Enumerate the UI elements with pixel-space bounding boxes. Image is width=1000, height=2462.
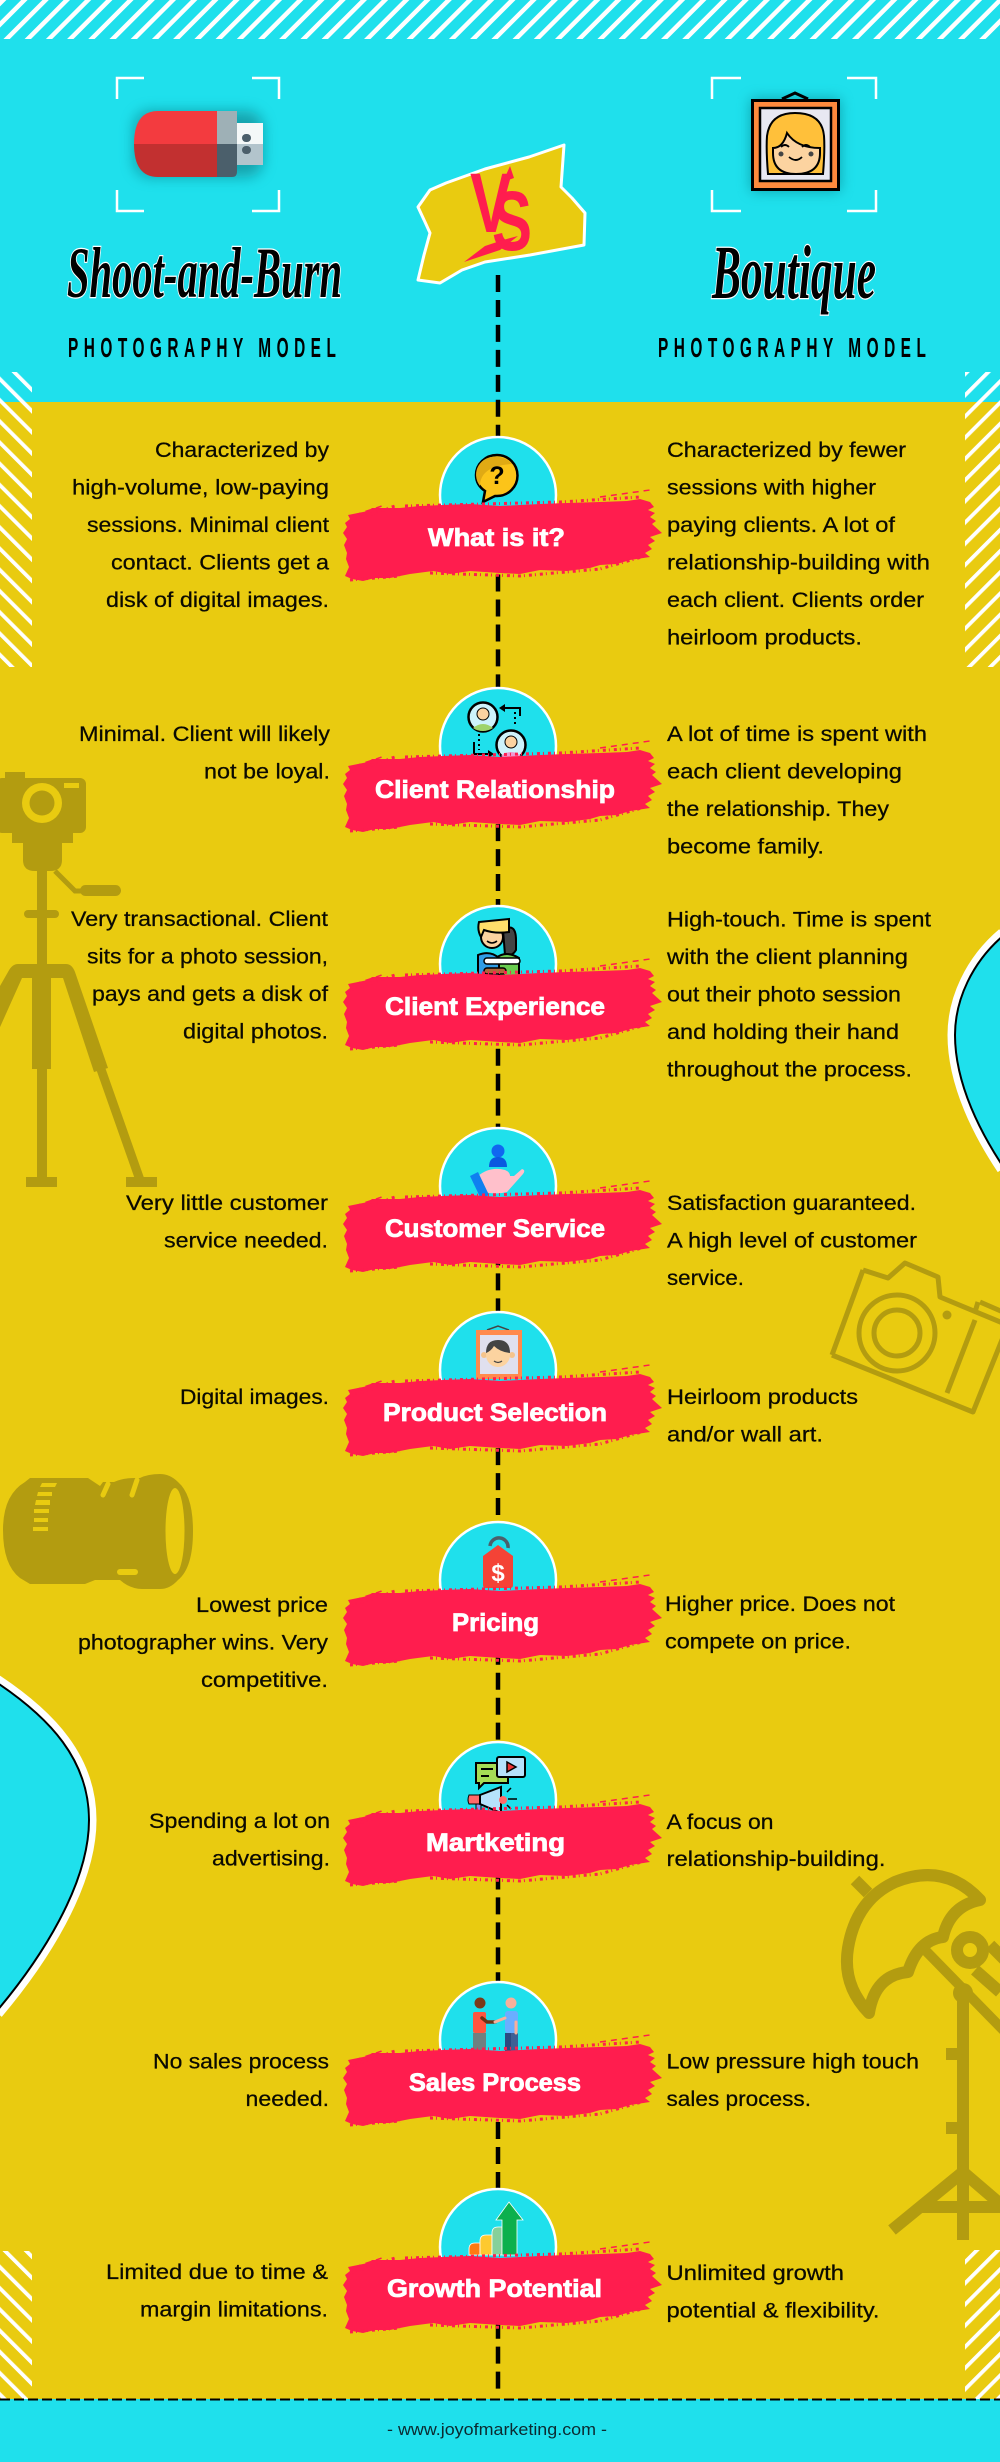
banner: Pricing: Pricing bbox=[452, 1609, 539, 1637]
banner: Growth Potential: Growth Potential bbox=[387, 2275, 602, 2303]
banner: Martketing: Martketing bbox=[426, 1829, 565, 1857]
icon: right viewfinder brackets bbox=[712, 78, 876, 211]
right text: each client developing bbox=[667, 760, 902, 784]
icon badge: growth chart bbox=[440, 2189, 556, 2305]
right text: each client. Clients order bbox=[667, 589, 924, 612]
silhouette: lens bbox=[3, 1474, 193, 1589]
left text: not be loyal. bbox=[204, 760, 330, 784]
right text: A focus on bbox=[666, 1811, 774, 1834]
left text: Limited due to time & bbox=[106, 2261, 328, 2284]
right text: throughout the process. bbox=[667, 1058, 912, 1082]
left text bbox=[72, 439, 330, 612]
left text: contact. Clients get a bbox=[111, 552, 329, 574]
right text: Unlimited growth bbox=[666, 2262, 844, 2285]
right text: A lot of time is spent with bbox=[667, 723, 927, 746]
lower right side stripes bbox=[965, 2250, 1000, 2399]
left text bbox=[78, 1594, 329, 1692]
panel: Client Experience bbox=[71, 906, 931, 1082]
icon badge: price tag bbox=[440, 1522, 556, 1638]
icon badge: question: ? bbox=[489, 462, 505, 490]
left text: Characterized by bbox=[155, 439, 330, 462]
icon badge: handshake bbox=[440, 1982, 556, 2098]
right text: paying clients. A lot of bbox=[667, 514, 895, 537]
left text: sessions. Minimal client bbox=[87, 514, 329, 537]
left text bbox=[106, 2261, 328, 2322]
right text bbox=[667, 1386, 858, 1446]
icon badge: hugging people bbox=[440, 906, 556, 1022]
right text: service. bbox=[667, 1267, 744, 1290]
left text: service needed. bbox=[164, 1230, 328, 1252]
subtitle: left: PHOTOGRAPHY MODEL bbox=[68, 332, 336, 363]
right text bbox=[666, 908, 931, 1082]
right text: relationship-building with bbox=[667, 552, 930, 574]
lower left side stripes bbox=[0, 2251, 32, 2399]
right text: Low pressure high touch bbox=[666, 2050, 919, 2074]
banner: What is it? bbox=[343, 490, 662, 581]
banner: Client Relationship bbox=[343, 741, 662, 832]
right text: with the client planning bbox=[666, 946, 908, 969]
icon badge: question bbox=[440, 437, 556, 553]
banner: Product Selection bbox=[343, 1365, 662, 1456]
icon badge: hand holding person bbox=[440, 1128, 556, 1244]
left text: Minimal. Client will likely bbox=[79, 723, 331, 746]
left text: No sales process bbox=[153, 2050, 329, 2074]
banner: Client Experience: Client Experience bbox=[385, 993, 605, 1021]
right text: become family. bbox=[667, 836, 824, 858]
right text: Satisfaction guaranteed. bbox=[667, 1192, 916, 1215]
right text bbox=[665, 1593, 895, 1654]
icon badge: framed boy portrait bbox=[440, 1312, 556, 1428]
right text: relationship-building. bbox=[666, 1848, 886, 1871]
left text bbox=[149, 1810, 330, 1870]
left text bbox=[79, 723, 331, 784]
panel: Growth Potential bbox=[106, 2189, 880, 2333]
VS badge bbox=[418, 145, 585, 283]
icon: USB drive bbox=[134, 111, 263, 177]
left text bbox=[71, 908, 328, 1044]
banner: What is it?: What is it? bbox=[428, 524, 565, 552]
left text: margin limitations. bbox=[140, 2298, 328, 2322]
right text: Higher price. Does not bbox=[665, 1593, 895, 1616]
left text bbox=[153, 2050, 329, 2111]
top striped band bbox=[0, 0, 1000, 39]
VS lettering: S bbox=[492, 174, 532, 268]
left text bbox=[126, 1192, 328, 1252]
banner: Client Relationship: Client Relationship bbox=[375, 776, 615, 804]
left text: photographer wins. Very bbox=[78, 1632, 329, 1654]
silhouette: umbrella light bbox=[847, 1875, 1000, 2240]
banner: Martketing bbox=[343, 1795, 662, 1886]
left text: advertising. bbox=[212, 1848, 330, 1870]
right text bbox=[667, 1192, 917, 1290]
panel: Sales Process bbox=[153, 1982, 919, 2126]
header background bbox=[0, 0, 1000, 402]
panel: Marketing bbox=[149, 1742, 886, 1886]
icon: portrait frame bbox=[751, 93, 840, 191]
right text bbox=[667, 439, 930, 650]
icon badge: price tag: $ bbox=[491, 1560, 505, 1587]
footer background bbox=[0, 2399, 1000, 2462]
right text: and/or wall art. bbox=[667, 1424, 823, 1446]
left text: Very transactional. Client bbox=[71, 908, 328, 931]
panel: Product Selection bbox=[180, 1312, 858, 1456]
footer website: - www.joyofmarketing.com - bbox=[387, 2420, 607, 2439]
left text: digital photos. bbox=[183, 1020, 328, 1044]
right text: compete on price. bbox=[665, 1630, 851, 1654]
right text: sessions with higher bbox=[667, 476, 876, 500]
silhouette: outline camera bbox=[832, 1263, 1000, 1412]
banner: Customer Service: Customer Service bbox=[385, 1215, 605, 1243]
right text bbox=[666, 2050, 919, 2111]
upper left side stripes bbox=[0, 372, 32, 667]
panel: right model header bbox=[658, 78, 926, 363]
left text: high-volume, low-paying bbox=[72, 476, 329, 500]
right text: Heirloom products bbox=[667, 1386, 858, 1409]
panel: What is it? bbox=[72, 437, 930, 650]
right text: out their photo session bbox=[667, 984, 901, 1006]
right text: and holding their hand bbox=[667, 1021, 899, 1044]
VS lettering bbox=[464, 156, 532, 268]
right text: heirloom products. bbox=[667, 626, 862, 650]
right text bbox=[666, 1811, 886, 1871]
panel: left model header bbox=[67, 78, 342, 363]
banner: Sales Process bbox=[343, 2035, 662, 2126]
left text: disk of digital images. bbox=[106, 589, 329, 612]
left text: Spending a lot on bbox=[149, 1810, 330, 1833]
banner: Pricing bbox=[343, 1575, 662, 1666]
icon: left viewfinder brackets bbox=[117, 78, 279, 211]
banner: Client Experience bbox=[343, 959, 662, 1050]
torn paper bbox=[418, 145, 585, 283]
title: Boutique: Boutique bbox=[711, 231, 876, 315]
panel: Pricing bbox=[78, 1522, 895, 1692]
cyan blob right bbox=[955, 935, 1000, 1168]
right text: sales process. bbox=[666, 2088, 811, 2111]
right text: potential & flexibility. bbox=[666, 2300, 880, 2322]
left text: Lowest price bbox=[196, 1594, 328, 1617]
banner: Product Selection: Product Selection bbox=[383, 1399, 607, 1427]
VS lettering: V bbox=[470, 156, 512, 250]
banner: Sales Process: Sales Process bbox=[409, 2069, 581, 2097]
left text: sits for a photo session, bbox=[87, 946, 328, 968]
upper right side stripes bbox=[965, 372, 1000, 667]
banner: Customer Service bbox=[343, 1181, 662, 1272]
right text bbox=[667, 723, 927, 858]
left text: Very little customer bbox=[126, 1192, 328, 1215]
left text: competitive. bbox=[201, 1669, 328, 1692]
silhouette: camera on tripod bbox=[0, 772, 157, 1187]
left text: pays and gets a disk of bbox=[92, 983, 328, 1006]
right text bbox=[666, 2262, 880, 2322]
footer dashed border bbox=[0, 2398, 1000, 2400]
right text: Characterized by fewer bbox=[667, 439, 906, 462]
banner: Growth Potential bbox=[343, 2242, 662, 2333]
icon badge: two clients bbox=[440, 688, 556, 804]
right text: A high level of customer bbox=[667, 1230, 917, 1252]
right text: the relationship. They bbox=[667, 798, 890, 821]
right text: High-touch. Time is spent bbox=[667, 908, 931, 932]
left text: needed. bbox=[246, 2088, 329, 2111]
icon badge: megaphone and messages bbox=[440, 1742, 556, 1858]
left text: Digital images. bbox=[180, 1386, 329, 1409]
title: Shoot-and-Burn: Shoot-and-Burn bbox=[67, 233, 342, 313]
panel: Client Relationship bbox=[79, 688, 927, 858]
cyan blob left bbox=[0, 1682, 89, 2012]
panel: Customer Service bbox=[126, 1128, 917, 1290]
subtitle: right: PHOTOGRAPHY MODEL bbox=[658, 332, 926, 363]
central dashed timeline bbox=[496, 275, 500, 2392]
